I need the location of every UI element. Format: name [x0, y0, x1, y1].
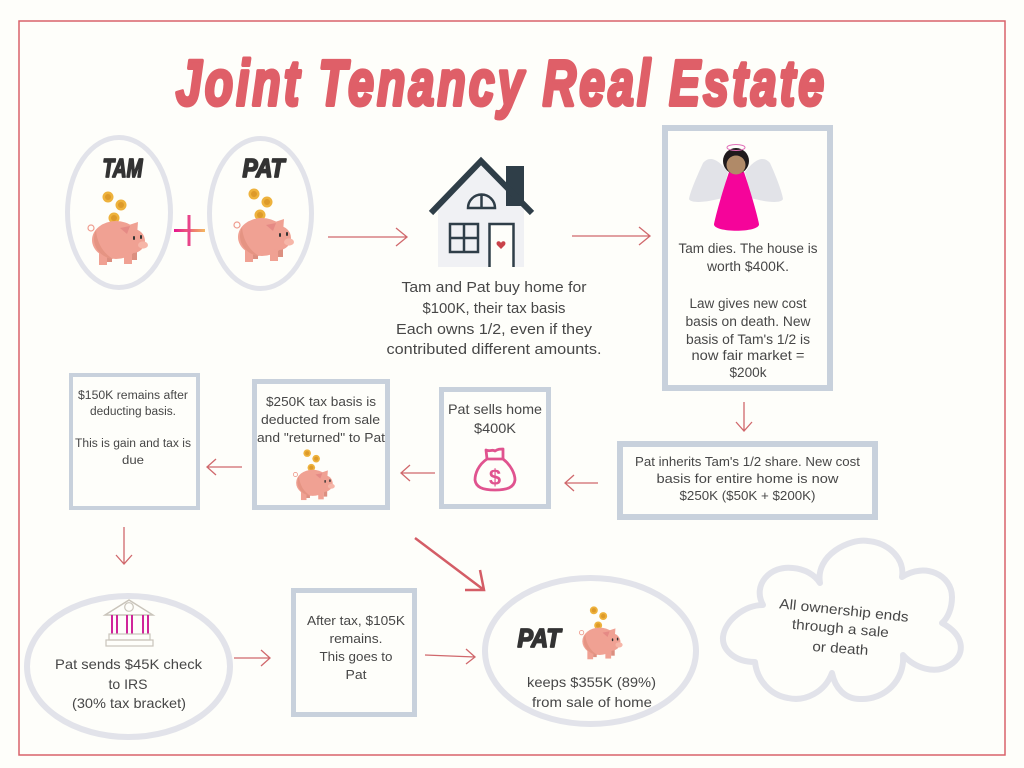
icon: plus sign: [174, 215, 205, 246]
label: Pat: PAT: [242, 153, 286, 183]
text: IRS check: Pat sends $45K check: [55, 656, 203, 672]
text: after tax: remains.: [330, 631, 382, 646]
text: gain remains: [75, 390, 191, 467]
panel: IRS oval: [27, 596, 230, 737]
text: after tax: Pat: [346, 667, 367, 682]
text: tax basis deducted: deducted from sale: [261, 412, 380, 427]
panel: Tam dies: [665, 128, 830, 388]
icon: bank building: [105, 600, 153, 646]
text: Pat keeps: [527, 674, 656, 710]
text: Pat sells: [448, 401, 542, 436]
text: Pat sells: $400K: [474, 420, 517, 436]
text: Pat keeps: keeps $355K (89%): [527, 674, 656, 690]
text: Tam dies: $200k: [730, 365, 767, 380]
text: gain remains: deducting basis.: [90, 406, 176, 418]
text: gain remains: $150K remains after: [78, 390, 188, 402]
text: Pat inherits: $250K ($50K + $200K): [680, 488, 816, 503]
text: Pat inherits: [635, 454, 860, 503]
arrow: diagonal to final oval: [415, 538, 484, 590]
arrow: to Pat sells: [565, 475, 598, 491]
panel: after tax: [294, 590, 414, 714]
label: Pat: PAT: [518, 623, 562, 653]
icon: house: [431, 161, 532, 267]
text: tax basis deducted: $250K tax basis is: [266, 394, 377, 409]
text: buy home: [386, 279, 602, 358]
text: Tam dies: Tam dies. The house is: [678, 241, 818, 256]
text: tax basis deducted: [257, 394, 385, 445]
icon: angel: [689, 144, 783, 231]
panel: Pat inherits: [620, 444, 875, 517]
panel: Pat sells: [442, 390, 548, 506]
text: IRS check: [55, 656, 203, 711]
arrow: to tax basis: [401, 465, 435, 481]
panel: Tam oval: [68, 138, 170, 288]
title: Joint Tenancy Real Estate: [176, 48, 824, 119]
icon: piggy bank: [579, 606, 623, 659]
text: Tam dies: now fair market =: [692, 348, 805, 363]
arrow: to house: [328, 228, 407, 246]
icon: Tam piggy bank: [88, 192, 148, 265]
panel: Pat keeps oval: [485, 578, 696, 724]
text: Pat sells: Pat sells home: [448, 401, 542, 417]
text: buy home: $100K, their tax basis: [422, 300, 566, 317]
text: ownership ends: or death: [812, 638, 869, 658]
text: Pat inherits: Pat inherits Tam's 1/2 share. New cost: [635, 454, 860, 469]
panel: tax basis deducted: [254, 382, 388, 508]
text: Pat inherits: basis for entire home is now: [656, 471, 839, 486]
arrow: to angel panel: [572, 227, 650, 245]
text: tax basis deducted: and "returned" to Pat: [257, 430, 385, 445]
icon: piggy bank: [293, 449, 335, 500]
icon: Pat piggy bank: [234, 188, 294, 262]
arrow: down to IRS: [116, 527, 132, 564]
arrow: to after tax: [234, 650, 270, 666]
text: IRS check: to IRS: [108, 676, 148, 692]
text: ownership ends: [779, 595, 910, 658]
text: gain remains: due: [122, 455, 144, 467]
text: Tam dies: [678, 241, 818, 380]
icon: money bag: $: [489, 465, 501, 490]
arrow: down to inherit panel: [736, 402, 752, 431]
text: Tam dies: basis on death. New: [686, 314, 811, 329]
text: IRS check: (30% tax bracket): [72, 695, 186, 711]
text: ownership ends: through a sale: [791, 616, 890, 640]
text: after tax: After tax, $105K: [307, 613, 405, 628]
text: after tax: This goes to: [320, 649, 392, 664]
text: after tax: [307, 613, 405, 682]
text: gain remains: This is gain and tax is: [75, 438, 191, 450]
text: Tam dies: worth $400K.: [706, 259, 789, 274]
panel: Pat oval: [210, 138, 312, 288]
panel: ownership cloud: [723, 541, 961, 699]
label: Tam: TAM: [102, 153, 143, 183]
text: Pat keeps: from sale of home: [532, 694, 652, 710]
arrow: to final oval: [425, 649, 475, 664]
panel: gain remains: [71, 375, 198, 508]
arrow: to gain panel: [207, 459, 242, 475]
text: buy home: Tam and Pat buy home for: [402, 279, 586, 296]
text: buy home: Each owns 1/2, even if they: [396, 321, 593, 338]
text: Tam dies: basis of Tam's 1/2 is: [686, 332, 810, 347]
text: ownership ends: All ownership ends: [779, 595, 910, 625]
text: Tam dies: Law gives new cost: [690, 296, 807, 311]
text: buy home: contributed different amounts.: [386, 341, 602, 358]
